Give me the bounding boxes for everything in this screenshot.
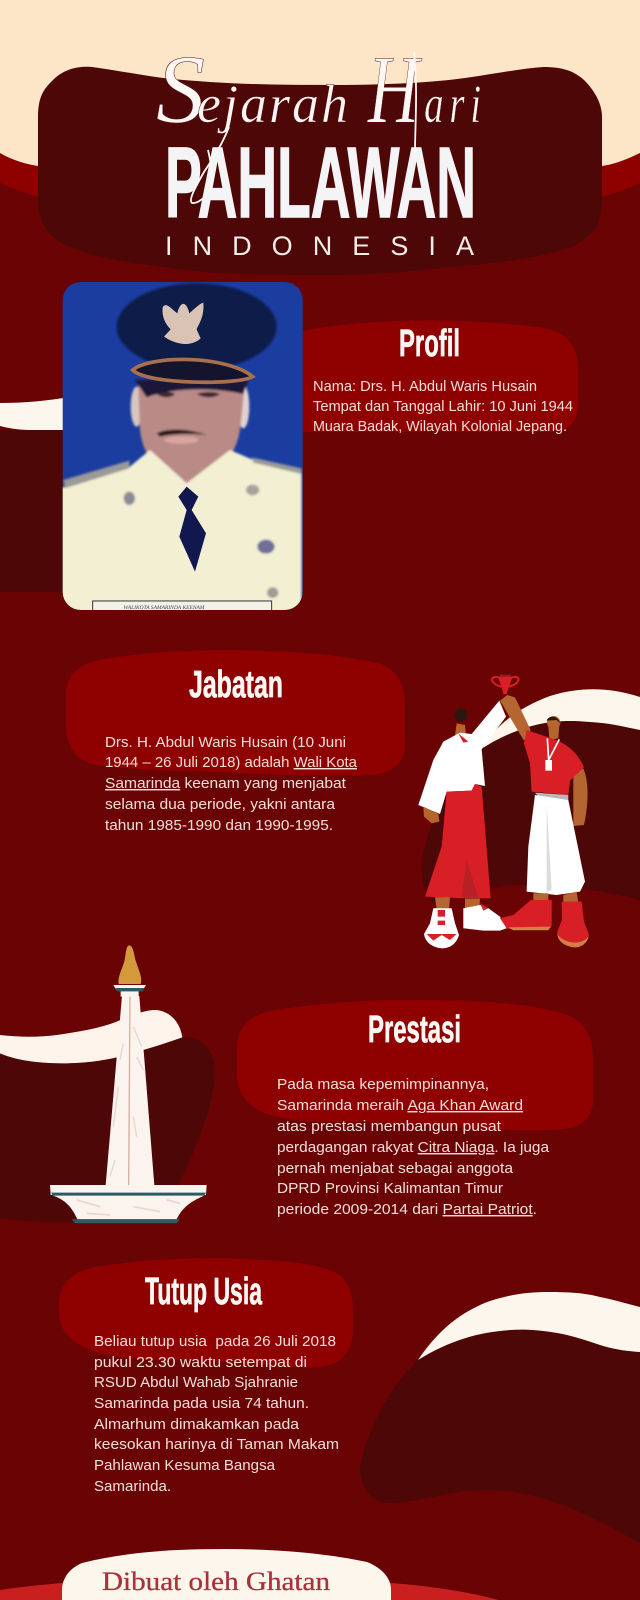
header cream shape xyxy=(0,0,640,166)
title xyxy=(156,36,487,261)
text: jabatan body xyxy=(105,735,357,834)
text: prestasi body xyxy=(277,1077,549,1218)
text: tutup usia body: Samarinda pada usia 74 tahun. xyxy=(94,1396,309,1412)
text: prestasi body: DPRD Provinsi Kalimantan Timur xyxy=(277,1181,503,1197)
text: prestasi body: perdagangan rakyat Citra Niaga . Ia juga xyxy=(277,1140,549,1156)
wave bottom right xyxy=(360,1292,640,1543)
wave behind monument xyxy=(0,1010,215,1222)
icon: trophy xyxy=(492,675,519,694)
text: profil body: Tempat dan Tanggal Lahir: 10 Juni 1944 xyxy=(313,399,573,415)
text: credit: Dibuat oleh Ghatan xyxy=(102,1567,330,1596)
text: tutup usia body: RSUD Abdul Wahab Sjahranie xyxy=(94,1375,298,1391)
panel: tutup usia xyxy=(59,1258,353,1495)
panel: jabatan xyxy=(66,650,405,834)
header red band xyxy=(0,145,640,197)
title script line: ejarah xyxy=(197,74,350,134)
title script line: H xyxy=(368,36,419,144)
text: profil body xyxy=(313,379,573,435)
text: prestasi body: atas prestasi membangun pusat xyxy=(277,1119,501,1135)
illustration: Monas monument xyxy=(50,945,207,1223)
heading: jabatan: Jabatan xyxy=(189,664,283,706)
text: tutup usia body: keesokan harinya di Taman Makam xyxy=(94,1437,339,1453)
text: jabatan body: tahun 1985-1990 dan 1990-1995. xyxy=(105,818,333,834)
portrait photo: WALIKOTA SAMARINDA KEENAM xyxy=(124,605,205,611)
text: tutup usia body: pukul 23.30 waktu setempat di xyxy=(94,1355,307,1371)
text: profil body: Muara Badak, Wilayah Kolonial Jepang. xyxy=(313,419,567,435)
left wave behind portrait xyxy=(0,397,70,592)
text: profil body: Nama: Drs. H. Abdul Waris Husain xyxy=(313,379,537,395)
portrait photo xyxy=(60,282,304,617)
panel: profil xyxy=(302,320,578,435)
person: left in white jacket and red skirt xyxy=(418,701,507,948)
text: tutup usia body xyxy=(94,1334,339,1495)
title script line: ari xyxy=(424,75,487,135)
text: prestasi body: Samarinda meraih Aga Khan Award xyxy=(277,1098,523,1114)
heading: tutup usia: Tutup Usia xyxy=(145,1271,263,1313)
text: jabatan body: Drs. H. Abdul Waris Husain (10 Juni xyxy=(105,735,346,751)
heading: prestasi: Prestasi xyxy=(368,1009,461,1051)
text: tutup usia body: Almarhum dimakamkan pada xyxy=(94,1417,299,1433)
footer: credit pill xyxy=(62,1549,391,1600)
text: tutup usia body: Beliau tutup usia pada 26 Juli 2018 xyxy=(94,1334,336,1350)
title country word: INDONESIA xyxy=(165,231,474,261)
illustration: two people raising trophy xyxy=(418,675,589,948)
text: tutup usia body: Samarinda. xyxy=(94,1479,171,1495)
footer red band xyxy=(0,1583,498,1600)
wave behind people xyxy=(422,689,640,903)
person: right in red shirt and white trousers xyxy=(500,695,589,947)
text: jabatan body: selama dua periode, yakni antara xyxy=(105,797,335,813)
title script line: S xyxy=(156,36,205,144)
text: prestasi body: pernah menjabat sebagai anggota xyxy=(277,1161,513,1177)
panel: prestasi xyxy=(237,1000,593,1218)
heading: profil: Profil xyxy=(399,323,460,365)
text: prestasi body: Pada masa kepemimpinannya, xyxy=(277,1077,489,1093)
text: prestasi body: periode 2009-2014 dari Partai Patriot . xyxy=(277,1202,537,1218)
text: tutup usia body: Pahlawan Kesuma Bangsa xyxy=(94,1458,275,1474)
title script line xyxy=(156,36,487,203)
text: jabatan body: 1944 – 26 Juli 2018) adalah Wali Kota xyxy=(105,755,357,771)
title backdrop xyxy=(38,67,602,275)
text: jabatan body: Samarinda keenam yang menjabat xyxy=(105,776,346,792)
